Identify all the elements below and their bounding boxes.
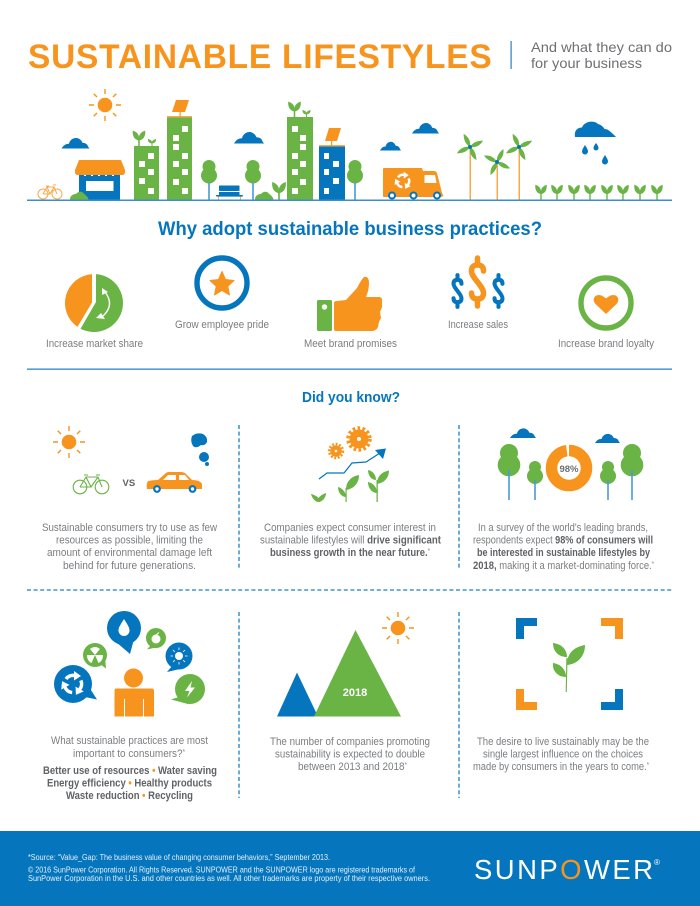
text: desire: made by consumers in the years to come. <box>473 761 681 773</box>
icon: bench <box>216 186 243 200</box>
icon: dollar signs <box>454 258 502 307</box>
text: practices list <box>43 765 217 802</box>
footer source text: *Source: “Value_Gap: The business value of changing consumer behaviors,” September 2013. <box>28 853 330 862</box>
icon: sprout <box>272 182 286 200</box>
text: question: What sustainable practices are most <box>51 735 209 747</box>
building: green short <box>133 131 159 200</box>
text: sustainable consumers: amount of environmental damage left <box>47 547 213 559</box>
text: practices list: Energy efficiency • Healthy products <box>47 778 212 790</box>
building: green with plants <box>287 102 313 200</box>
text: question: important to consumers? <box>73 748 196 760</box>
icon: green bicycle <box>73 475 109 494</box>
text: sustainable consumers: resources as possible, limiting the <box>56 534 203 546</box>
text: survey: be interested in sustainable lifestyles by <box>477 547 651 559</box>
icon: sun <box>89 89 121 121</box>
icon: bicycle <box>38 185 62 199</box>
ground line <box>27 200 672 201</box>
icon: heart badge <box>581 278 631 328</box>
building: blue with solar panel <box>319 128 345 200</box>
icon: shop <box>75 160 125 200</box>
icon: fan bubble <box>83 643 107 668</box>
text: sustainable consumers: behind for future generations. <box>63 560 196 572</box>
subtitle: for your business <box>531 55 642 71</box>
panel: desire to live sustainably <box>473 618 649 773</box>
text: companies expect <box>260 522 441 559</box>
panel: benefits row <box>46 258 654 350</box>
dashed dividers <box>27 425 672 798</box>
icon: bushes <box>70 192 274 200</box>
text: sustainable consumers: Sustainable consumers try to use as few <box>42 522 218 534</box>
text: number of companies: * <box>405 762 407 769</box>
icon: trees <box>498 444 643 500</box>
logo: sunpower: SUNPOWER <box>474 854 653 885</box>
text: desire: The desire to live sustainably may be the <box>477 736 649 748</box>
logo: sunpower: ® <box>654 858 660 867</box>
icon: sun bubble <box>166 642 192 672</box>
panel: use few resources <box>42 426 218 572</box>
panel: 98 percent survey <box>473 428 654 572</box>
icon: apple bubble <box>146 628 166 650</box>
icon: gears <box>329 428 370 458</box>
icon: recycling truck <box>383 168 444 198</box>
text: companies expect: sustainable lifestyles will drive significant <box>260 534 441 546</box>
label: increase sales: Increase sales <box>448 319 508 331</box>
text: companies expect: Companies expect consumer interest in <box>264 522 436 534</box>
text: sustainable consumers <box>42 522 218 572</box>
chart: mountains 2013 vs 2018 <box>277 630 401 716</box>
title: SUSTAINABLE LIFESTYLES <box>28 38 492 76</box>
panel: consumer interest growth <box>260 428 441 559</box>
icon: thumbs up <box>317 277 382 331</box>
icon: water bubble <box>107 611 141 654</box>
text: survey: In a survey of the world's leading brands, <box>478 522 648 534</box>
footer source text <box>28 853 430 883</box>
label: vs: VS <box>122 478 135 489</box>
text: desire <box>473 736 649 773</box>
subtitle <box>531 39 672 71</box>
icon: person <box>114 668 154 716</box>
building: green tall with solar panel <box>167 100 192 200</box>
footer <box>0 831 700 906</box>
text: question <box>51 735 209 760</box>
heading: why adopt: Why adopt sustainable business practices? <box>158 219 542 240</box>
icon: focus corners <box>516 618 623 710</box>
panel: companies double <box>270 612 430 773</box>
subtitle: And what they can do <box>531 39 672 55</box>
icon: growth arrow <box>319 448 386 479</box>
icon: energy bubble <box>171 674 205 704</box>
label: meet brand promises: Meet brand promises <box>304 338 397 350</box>
label: increase market share: Increase market share <box>46 338 143 350</box>
icon: recycle bubble <box>54 665 97 703</box>
chart: 98 percent donut: 98% <box>559 464 579 475</box>
text: companies expect: * <box>428 548 430 555</box>
icon: plant <box>553 643 585 692</box>
footer source text: © 2016 SunPower Corporation. All Rights Reserved. SUNPOWER and the SUNPOWER logo are registered trademarks of <box>28 866 416 874</box>
heading: did you know: Did you know? <box>302 389 400 406</box>
text: number of companies: between 2013 and 2018 <box>298 761 418 773</box>
icon: wind turbines <box>451 128 538 200</box>
text: survey <box>473 522 654 572</box>
chart: mountains 2013 vs 2018: 2018 <box>343 687 367 699</box>
label: increase brand loyalty: Increase brand loyalty <box>558 338 654 350</box>
panel: sustainable practices <box>43 611 217 802</box>
chart: 98 percent donut <box>552 450 586 486</box>
text: practices list: Waste reduction • Recycling <box>66 790 193 802</box>
icon: seedlings <box>311 470 389 502</box>
icon: market share pie <box>65 274 123 332</box>
icon: orange car with smoke <box>147 433 209 492</box>
text: desire: * <box>647 762 649 769</box>
icon: clouds <box>510 428 620 443</box>
text: survey: * <box>652 561 654 568</box>
icon: sun <box>53 426 85 458</box>
text: desire: single largest influence on the choices <box>483 748 643 760</box>
text: question: * <box>183 749 185 756</box>
text: number of companies: sustainability is expected to double <box>275 748 425 760</box>
icon: clouds <box>62 123 439 150</box>
text: number of companies: The number of companies promoting <box>270 736 430 748</box>
text: practices list: Better use of resources • Water saving <box>43 765 217 777</box>
illustration: sustainable city skyline <box>27 89 672 201</box>
icon: star badge <box>197 258 247 308</box>
text: companies expect: business growth in the near future. <box>270 547 428 559</box>
label: grow employee pride: Grow employee pride <box>175 319 269 331</box>
text: survey: respondents expect 98% of consumers will <box>473 534 653 546</box>
text: number of companies <box>270 736 430 773</box>
trees <box>201 160 217 200</box>
text: survey: 2018, making it a market-dominating force. <box>473 560 681 572</box>
footer source text: SunPower Corporation in the U.S. and other countries as well. All other trademarks are property of their respective owners. <box>28 874 430 883</box>
icon: sun <box>382 612 414 644</box>
icon: row of seedlings <box>535 185 663 200</box>
icon: rain cloud <box>575 122 616 164</box>
